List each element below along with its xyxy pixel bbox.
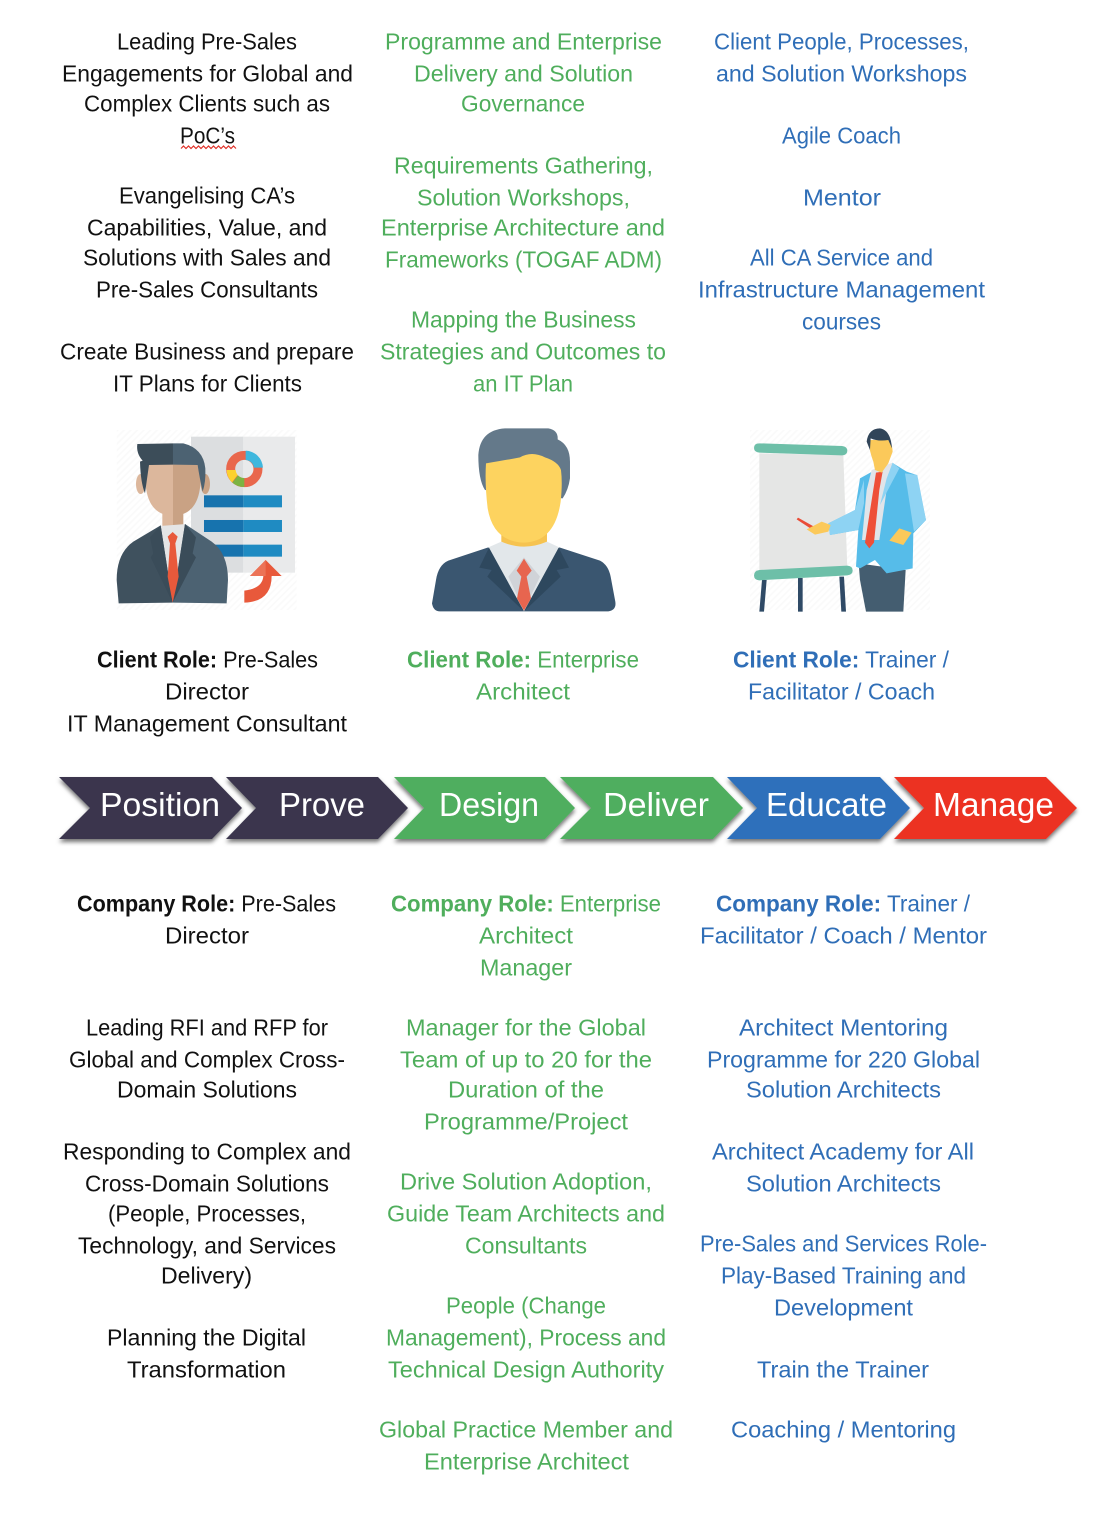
client text: position and prove column: Pre-Sales Consultants: [96, 276, 318, 302]
client role: trainer: [733, 646, 950, 704]
client text: position and prove column: [60, 28, 354, 396]
chevron: Educate: [727, 777, 910, 839]
client text: position and prove column: Evangelising CA’s: [119, 182, 295, 208]
client role: trainer: Facilitator / Coach: [748, 678, 935, 704]
chevron: Position: Position: [100, 786, 220, 823]
company text: pre-sales column: (People, Processes,: [108, 1200, 306, 1226]
company text: pre-sales column: [63, 1014, 351, 1382]
company role: pre-sales: Company Role: Pre-Sales: [77, 890, 336, 916]
company role: enterprise architect manager: Company Role: Enterprise: [391, 890, 661, 916]
client text: position and prove column: Create Business and prepare: [60, 338, 354, 364]
chevron process bar: [59, 777, 1077, 839]
company text: design and deliver column: Global Practice Member and: [379, 1416, 673, 1442]
company text: educate column: Programme for 220 Global: [707, 1046, 980, 1072]
client text: educate column: Agile Coach: [782, 122, 901, 148]
company text: pre-sales column: Delivery): [161, 1262, 252, 1288]
company text: educate column: Solution Architects: [746, 1170, 941, 1196]
company text: pre-sales column: Responding to Complex and: [63, 1138, 351, 1164]
client text: design and deliver column: Strategies and Outcomes to: [380, 338, 666, 364]
client text: educate column: courses: [802, 308, 881, 334]
client text: design and deliver column: Enterprise Architecture and: [381, 214, 665, 240]
company text: pre-sales column: Planning the Digital: [107, 1324, 306, 1350]
company text: pre-sales column: Leading RFI and RFP for: [86, 1014, 328, 1040]
chevron: Design: Design: [439, 786, 539, 823]
client role: enterprise architect: [407, 646, 639, 704]
company text: pre-sales column: Domain Solutions: [117, 1076, 297, 1102]
client text: design and deliver column: Requirements Gathering,: [394, 152, 653, 178]
company text: design and deliver column: Consultants: [465, 1232, 587, 1258]
company text: educate column: Play-Based Training and: [721, 1262, 966, 1288]
client text: design and deliver column: Mapping the Business: [411, 306, 636, 332]
company role: pre-sales: Director: [165, 922, 249, 948]
chevron: Prove: Prove: [279, 786, 365, 823]
client text: design and deliver column: Frameworks (TOGAF ADM): [385, 246, 662, 272]
company text: design and deliver column: Guide Team Architects and: [387, 1200, 665, 1226]
company text: design and deliver column: People (Change: [446, 1292, 606, 1318]
chevron: Deliver: Deliver: [603, 786, 709, 823]
client text: position and prove column: Complex Clients such as: [84, 90, 330, 116]
client role: enterprise architect: Client Role: Enterprise: [407, 646, 639, 672]
client text: educate column: Infrastructure Management: [698, 276, 986, 302]
company text: educate column: Solution Architects: [746, 1076, 941, 1102]
client text: design and deliver column: Solution Workshops,: [417, 184, 630, 210]
company text: design and deliver column: Programme/Project: [424, 1108, 629, 1134]
company role: enterprise architect manager: [391, 890, 661, 980]
client text: position and prove column: IT Plans for Clients: [113, 370, 302, 396]
client role: trainer: Client Role: Trainer /: [733, 646, 950, 672]
chevron: Position: [59, 777, 242, 839]
company role: trainer: Company Role: Trainer /: [716, 890, 971, 916]
icon: pre-sales consultant with report: [117, 430, 297, 610]
client text: educate column: Client People, Processes,: [714, 28, 969, 54]
client text: position and prove column: Leading Pre-Sales: [117, 28, 297, 54]
company text: design and deliver column: [379, 1014, 673, 1474]
company text: pre-sales column: Transformation: [127, 1356, 286, 1382]
client text: position and prove column: Solutions with Sales and: [83, 244, 331, 270]
client text: design and deliver column: Governance: [461, 90, 585, 116]
company role: enterprise architect manager: Manager: [480, 954, 572, 980]
icon: trainer at flip chart: [750, 428, 930, 612]
company role: trainer: Facilitator / Coach / Mentor: [700, 922, 987, 948]
company text: pre-sales column: Cross-Domain Solutions: [85, 1170, 329, 1196]
company role: enterprise architect manager: Architect: [479, 922, 574, 948]
client text: educate column: and Solution Workshops: [716, 60, 967, 86]
client role: pre-sales: Director: [165, 678, 249, 704]
company role: trainer: [700, 890, 987, 948]
client text: position and prove column: Capabilities, Value, and: [87, 214, 327, 240]
company text: educate column: Architect Academy for All: [712, 1138, 974, 1164]
company text: design and deliver column: Drive Solution Adoption,: [400, 1168, 652, 1194]
chevron: Design: [394, 777, 575, 839]
company text: pre-sales column: Technology, and Services: [78, 1232, 336, 1258]
company text: design and deliver column: Management), Process and: [386, 1324, 666, 1350]
client text: design and deliver column: an IT Plan: [473, 370, 573, 396]
company text: design and deliver column: Manager for the Global: [406, 1014, 646, 1040]
chevron: Deliver: [560, 777, 743, 839]
client text: design and deliver column: Programme and Enterprise: [385, 28, 662, 54]
company text: educate column: Architect Mentoring: [739, 1014, 948, 1040]
client text: educate column: [698, 28, 986, 334]
icon: enterprise architect avatar: [432, 428, 615, 611]
client text: design and deliver column: Delivery and Solution: [414, 60, 633, 86]
company role: pre-sales: [77, 890, 336, 948]
client text: educate column: Mentor: [803, 184, 881, 210]
chevron: Educate: Educate: [766, 786, 887, 823]
company text: design and deliver column: Technical Design Authority: [388, 1356, 665, 1382]
client role: pre-sales: [67, 646, 348, 736]
client text: educate column: All CA Service and: [750, 244, 933, 270]
chevron: Manage: Manage: [933, 786, 1054, 823]
client role: pre-sales: Client Role: Pre-Sales: [97, 646, 318, 672]
company text: educate column: Pre-Sales and Services Role-: [700, 1230, 987, 1256]
chevron: Prove: [226, 777, 408, 839]
company text: pre-sales column: Global and Complex Cross-: [69, 1046, 345, 1072]
chevron: Manage: [894, 777, 1077, 839]
client text: design and deliver column: [380, 28, 666, 396]
company text: educate column: Coaching / Mentoring: [731, 1416, 956, 1442]
client role: pre-sales: IT Management Consultant: [67, 710, 348, 736]
company text: design and deliver column: Enterprise Architect: [424, 1448, 630, 1474]
company text: educate column: Train the Trainer: [757, 1356, 929, 1382]
client text: position and prove column: PoC’s: [180, 122, 235, 148]
company text: educate column: Development: [774, 1294, 914, 1320]
company text: design and deliver column: Duration of the: [448, 1076, 604, 1102]
client role: enterprise architect: Architect: [476, 678, 571, 704]
client text: position and prove column: Engagements for Global and: [62, 60, 353, 86]
company text: educate column: [700, 1014, 987, 1442]
company text: design and deliver column: Team of up to 20 for the: [400, 1046, 652, 1072]
